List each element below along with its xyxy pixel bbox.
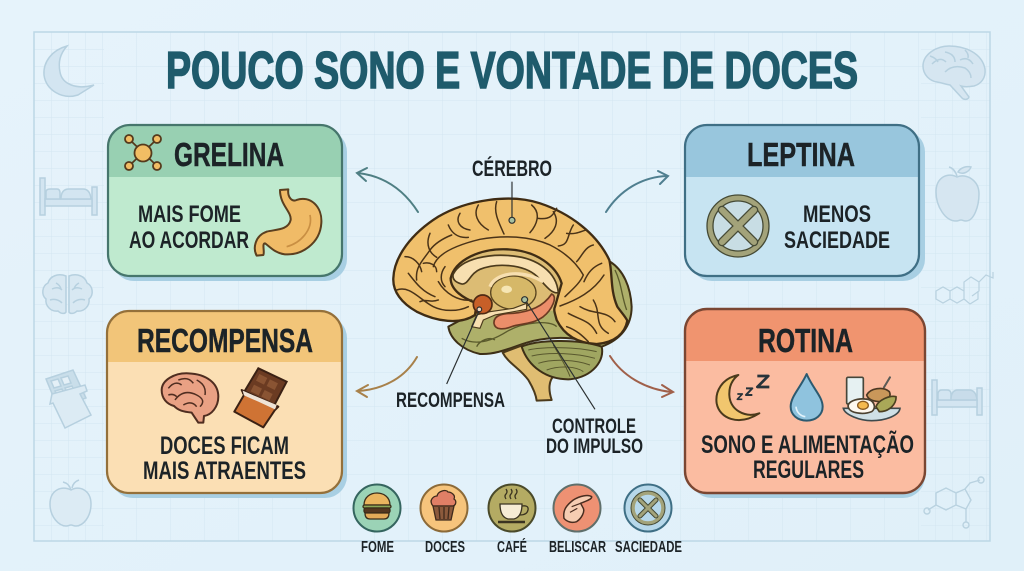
text: menos saciedade [784,201,890,254]
heading: leptina: LEPTINA [747,136,855,173]
text: menos saciedade: MENOS [803,201,871,228]
text: sono e alimentacao regulares [701,429,914,484]
brain: pointer lines [447,182,595,409]
panel: leptina [685,125,925,281]
label: controle do impulso: CONTROLE [552,415,636,438]
background icon: molecule upper [936,272,993,304]
icon: chocolate bar [234,368,287,427]
background icon: brain top view [43,275,92,313]
heading: grelina: GRELINA [174,136,284,173]
text: mais fome ao acordar: MAIS FOME [138,201,241,228]
label: BELISCAR [549,539,606,556]
arrow: to leptina [606,171,668,212]
text: doces ficam mais atraentes [143,432,306,485]
icon: moon and zzz [716,375,769,420]
arrow: to grelina [357,168,418,212]
text: sono e alimentacao regulares: SONO E ALIMENTAÇÃO [701,429,914,459]
legend: cafe [488,484,536,556]
brain: olive folds [462,270,627,347]
brain: cerebellum [522,341,602,379]
background icon: moon [44,46,94,96]
panel: recompensa [107,311,347,498]
legend: beliscar [549,484,606,556]
brain: corpus callosum band [453,255,558,293]
icon: brain [162,373,218,423]
icon: coffee cup [498,489,528,522]
heading: recompensa: RECOMPENSA [137,322,313,359]
brain: sulci [397,202,615,342]
icon: molecule [125,135,161,170]
icon: crossed circle small [631,491,665,525]
heading: rotina: ROTINA [758,322,853,359]
background icon: apple left [50,480,91,526]
arrow: to recompensa [357,357,417,397]
label: SACIEDADE [615,539,682,556]
brain: hippocampus [494,294,554,329]
brain diagram [393,182,632,409]
text: sono e alimentacao regulares: REGULARES [753,456,864,484]
label: controle do impulso: DO IMPULSO [546,435,643,458]
label: controle do impulso [546,415,643,458]
text: menos saciedade: SACIEDADE [784,227,890,254]
text: mais fome ao acordar [129,201,249,254]
icon: stomach [255,189,321,256]
text: doces ficam mais atraentes: DOCES FICAM [160,432,289,460]
icon: burger [363,493,391,519]
background icon: bed left [40,178,97,215]
legend: saciedade [615,484,682,556]
brain: interior base [451,249,562,317]
panel: rotina [685,309,925,498]
label: recompensa: RECOMPENSA [396,389,505,412]
label: FOME [361,539,394,556]
icon: water drop [791,374,823,421]
background icon: brain side [923,46,985,99]
icon: cupcake [431,491,456,520]
text: mais fome ao acordar: AO ACORDAR [129,227,249,254]
legend: doces [420,484,468,556]
brain: brainstem [503,345,555,401]
icon: pointing hand [564,496,592,522]
arrow: to rotina [610,356,673,397]
background icon: molecule lower [924,477,984,528]
icon: crossed circle [707,195,769,257]
brain: cream strip near nucleus [472,303,527,328]
background icon: apple right [936,167,979,221]
label: DOCES [425,539,465,556]
panel: grelina [108,125,347,281]
brain: cortex [393,199,627,344]
background icon: bed right [932,380,982,415]
brain: reward nucleus [473,295,492,314]
label: cerebro: CÉREBRO [472,156,552,181]
brain: limbic olive region [448,262,632,354]
brain: thalamus [490,274,543,309]
brain: pointer dots [477,217,528,312]
label: CAFÉ [497,537,527,556]
text: doces ficam mais atraentes: MAIS ATRAENTES [143,457,306,485]
icon: breakfast [843,377,900,421]
legend: fome [354,484,400,556]
background icon: chocolate left [46,370,91,428]
